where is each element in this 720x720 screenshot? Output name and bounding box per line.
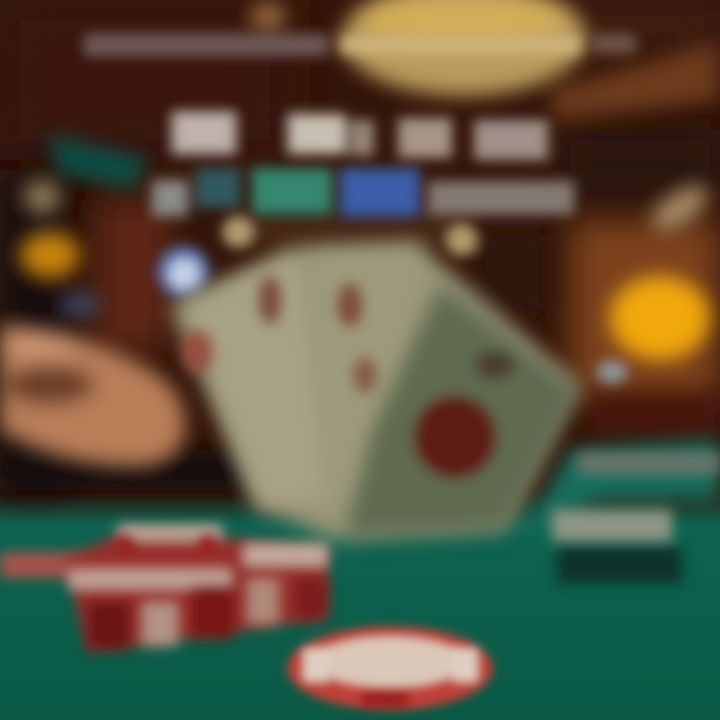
room background	[0, 0, 720, 490]
heading blur: top line	[84, 34, 636, 56]
right chip stack	[520, 440, 720, 583]
chandelier	[251, 0, 586, 96]
heading blur: large line	[172, 112, 548, 160]
heading blur: coloured line	[152, 168, 574, 216]
right lamp	[597, 177, 715, 383]
left lamp	[20, 180, 98, 317]
fan of cards	[170, 216, 580, 540]
blue glowing chip	[158, 246, 210, 298]
left chip stack	[0, 524, 328, 652]
hand	[0, 325, 185, 466]
front poker chip	[287, 626, 493, 710]
shadow behind cards	[0, 450, 290, 490]
teal wall patch	[48, 135, 148, 190]
